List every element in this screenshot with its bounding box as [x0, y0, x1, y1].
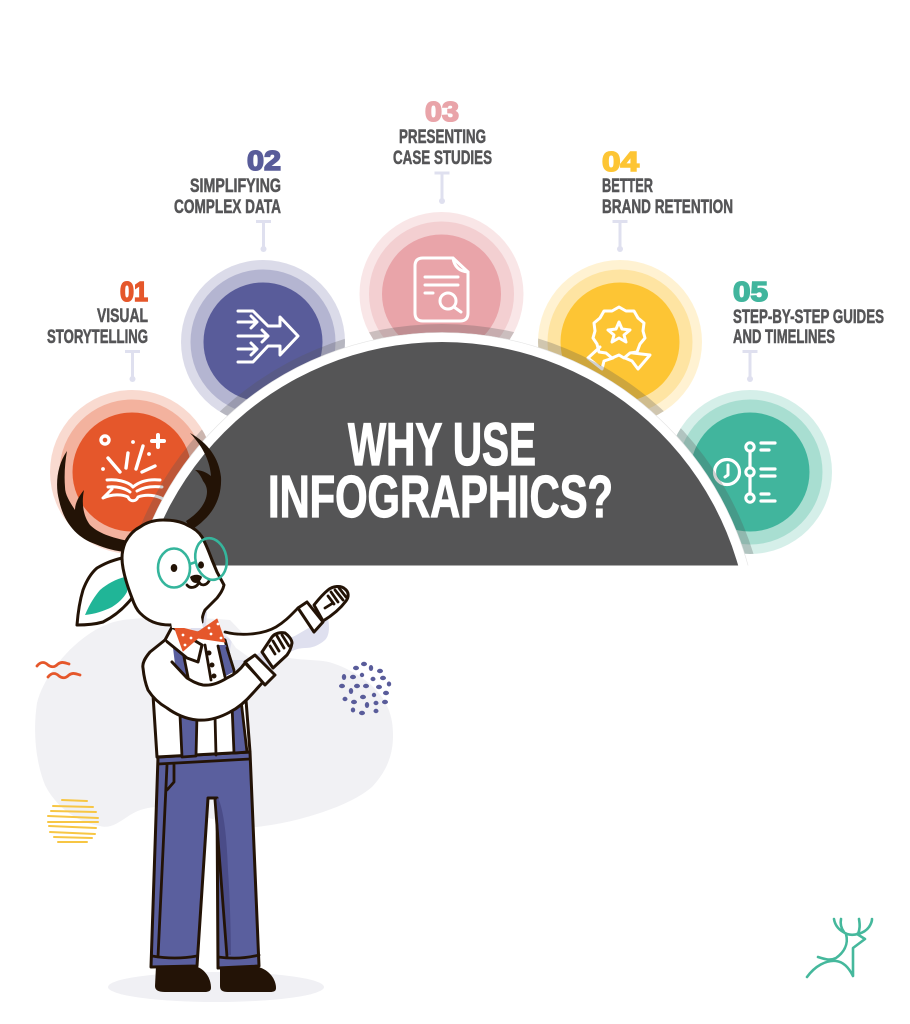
number 04: 04 [602, 146, 639, 177]
circle 05 teal [668, 390, 832, 554]
head [122, 520, 224, 625]
number 02: 02 [247, 145, 281, 176]
decoration: yellow striped circle [48, 800, 98, 842]
logo: deer mark [807, 919, 872, 977]
label presenting case studies: PRESENTING [399, 126, 486, 148]
face details [171, 561, 209, 587]
glasses [158, 535, 231, 588]
shadow of dome over circles [141, 324, 754, 554]
bow tie [174, 619, 225, 651]
title: WHY USE [348, 411, 536, 478]
label visual storytelling: STORYTELLING [47, 326, 148, 348]
number 03: 03 [425, 96, 459, 127]
number 01: 01 [120, 276, 148, 307]
connector 04 [612, 222, 628, 248]
label better brand retention [602, 175, 733, 218]
raised hand [314, 586, 348, 621]
circle 04 yellow [538, 260, 702, 424]
title: INFOGRAPHICS? [268, 464, 613, 530]
decoration: orange squiggles [37, 662, 80, 678]
antlers [57, 433, 221, 552]
deer character [57, 433, 348, 992]
label better brand retention: BRAND RETENTION [602, 196, 733, 218]
background blob [35, 617, 393, 827]
shoes [155, 966, 276, 992]
label step-by-step guides and timelines: AND TIMELINES [733, 326, 835, 348]
connector 05 [742, 352, 758, 378]
connector 02 [256, 222, 271, 248]
front arm [143, 633, 292, 720]
ear [77, 558, 132, 625]
label presenting case studies: CASE STUDIES [393, 147, 492, 169]
icon: timeline with clock [714, 443, 775, 502]
label simplifying complex data: SIMPLIFYING [190, 175, 281, 197]
title [268, 411, 613, 530]
step 02 label [174, 145, 281, 218]
icon: document with magnifier [415, 258, 468, 321]
shirt torso [150, 632, 250, 757]
step 04 label [602, 146, 733, 218]
label better brand retention: BETTER [602, 175, 653, 197]
shirt buttons [206, 650, 216, 678]
connector 01 [125, 352, 140, 378]
label visual storytelling [47, 305, 148, 348]
icon: open book with sparks [101, 435, 164, 501]
upper arm pointing right [225, 586, 348, 658]
label visual storytelling: VISUAL [97, 305, 148, 327]
circle 03 pink [360, 212, 524, 376]
label step-by-step guides and timelines [733, 306, 884, 348]
circle 01 orange [50, 390, 214, 554]
label simplifying complex data: COMPLEX DATA [174, 196, 281, 218]
number 05: 05 [733, 276, 768, 307]
suspenders upper [170, 645, 234, 755]
collar [165, 627, 202, 662]
trousers [151, 752, 259, 968]
decoration: navy dots [339, 662, 391, 715]
icon: merging arrows [238, 311, 298, 362]
icon: award rosette [588, 307, 650, 369]
step 03 label [393, 96, 492, 169]
label presenting case studies [393, 126, 492, 169]
step 05 label [733, 276, 884, 348]
label simplifying complex data [174, 175, 281, 218]
central dome [152, 332, 748, 566]
ground shadow [108, 972, 324, 1002]
circle 02 navy [181, 260, 345, 424]
suspenders lower [180, 700, 247, 757]
connector 03 [434, 173, 450, 200]
step 01 label [47, 276, 148, 348]
lower hand [262, 633, 292, 668]
cover neck outline [170, 617, 203, 628]
lavender shadow behind arms [187, 598, 329, 682]
